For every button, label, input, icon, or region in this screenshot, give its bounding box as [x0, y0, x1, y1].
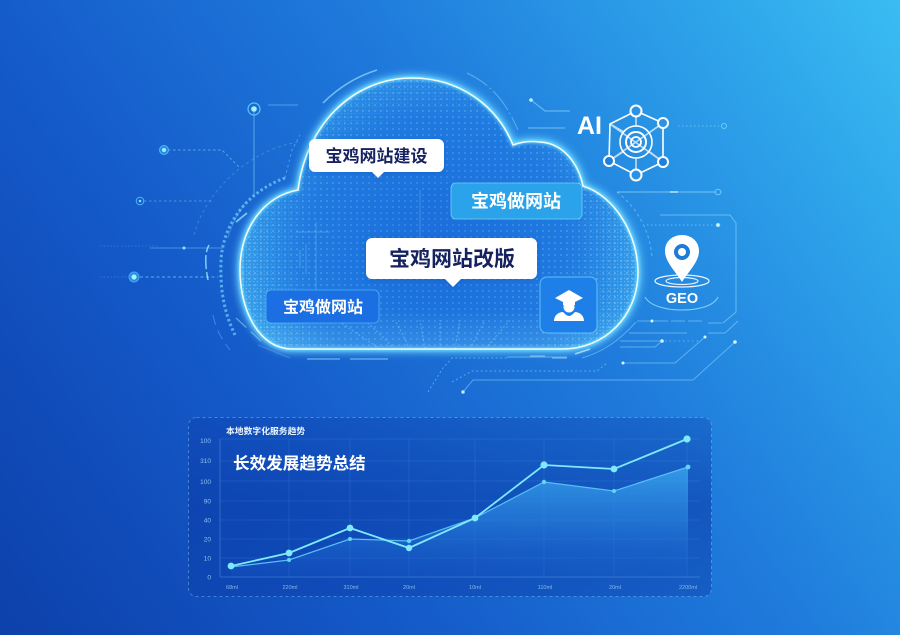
- label: 宝鸡做网站 (lower left): 宝鸡做网站: [283, 298, 363, 316]
- left circuit decorations: [100, 103, 388, 359]
- cloud glow: [240, 78, 638, 349]
- label: 宝鸡做网站 (lower left): [266, 290, 379, 323]
- chart small title: 本地数字化服务趋势: [226, 425, 305, 436]
- icon: graduate user: [540, 277, 597, 333]
- outer arcs: [194, 142, 298, 235]
- y axis labels: 100: [200, 438, 211, 445]
- label: 宝鸡网站改版: [366, 238, 537, 287]
- x axis labels: 220ml: [283, 585, 297, 591]
- cloud outline: [240, 78, 638, 349]
- y axis labels: 0: [207, 574, 211, 582]
- y axis labels: 10: [204, 556, 211, 562]
- x axis labels: [226, 585, 697, 591]
- lower circuit lines: [428, 320, 738, 394]
- panel frame: [188, 418, 712, 596]
- label: 宝鸡做网站 (upper right): 宝鸡做网站: [471, 190, 561, 212]
- dotted ring around cloud: [221, 178, 285, 335]
- x axis labels: 10ml: [469, 585, 481, 591]
- y axis labels: 100: [200, 479, 211, 486]
- upper right circuit lines: [528, 98, 726, 257]
- top arcs around cloud: [323, 70, 518, 130]
- x axis labels: 20ml: [403, 585, 415, 591]
- x axis labels: 20ml: [609, 585, 621, 591]
- area series: [231, 467, 688, 577]
- GEO frame: [645, 215, 736, 323]
- upper line: [228, 435, 691, 569]
- horizontal lines: [100, 246, 223, 250]
- y axis labels: 90: [204, 498, 211, 506]
- node line: top: [248, 103, 298, 197]
- y axis labels: [200, 438, 211, 582]
- x axis labels: 310ml: [344, 585, 358, 591]
- icon: GEO pin: [655, 235, 709, 287]
- cloud: [236, 74, 642, 354]
- AI label: AI: [577, 112, 602, 140]
- node line: upper left: [160, 146, 240, 168]
- chart grid: [220, 439, 700, 577]
- label: 宝鸡网站建设: 宝鸡网站建设: [326, 146, 428, 166]
- label: 宝鸡网站改版: 宝鸡网站改版: [389, 247, 515, 271]
- label: 宝鸡网站建设: [309, 139, 444, 178]
- x axis labels: 68ml: [226, 585, 238, 591]
- lower line: [231, 465, 690, 567]
- cloud dot grid: [236, 74, 642, 354]
- label: 宝鸡做网站 (upper right): [451, 183, 582, 219]
- chart panel: [188, 418, 712, 596]
- GEO label: GEO: [666, 291, 698, 307]
- node line: lower left: [100, 272, 218, 282]
- icon: AI network: [604, 106, 668, 180]
- x axis labels: 2200ml: [679, 585, 697, 591]
- chart main title: 长效发展趋势总结: [233, 453, 366, 473]
- y axis labels: 310: [200, 458, 211, 465]
- x axis labels: 110ml: [538, 585, 552, 591]
- cloud body: [240, 78, 638, 349]
- y axis labels: 20: [204, 536, 211, 544]
- node line: middle left: [136, 197, 213, 205]
- y axis labels: 40: [204, 518, 211, 524]
